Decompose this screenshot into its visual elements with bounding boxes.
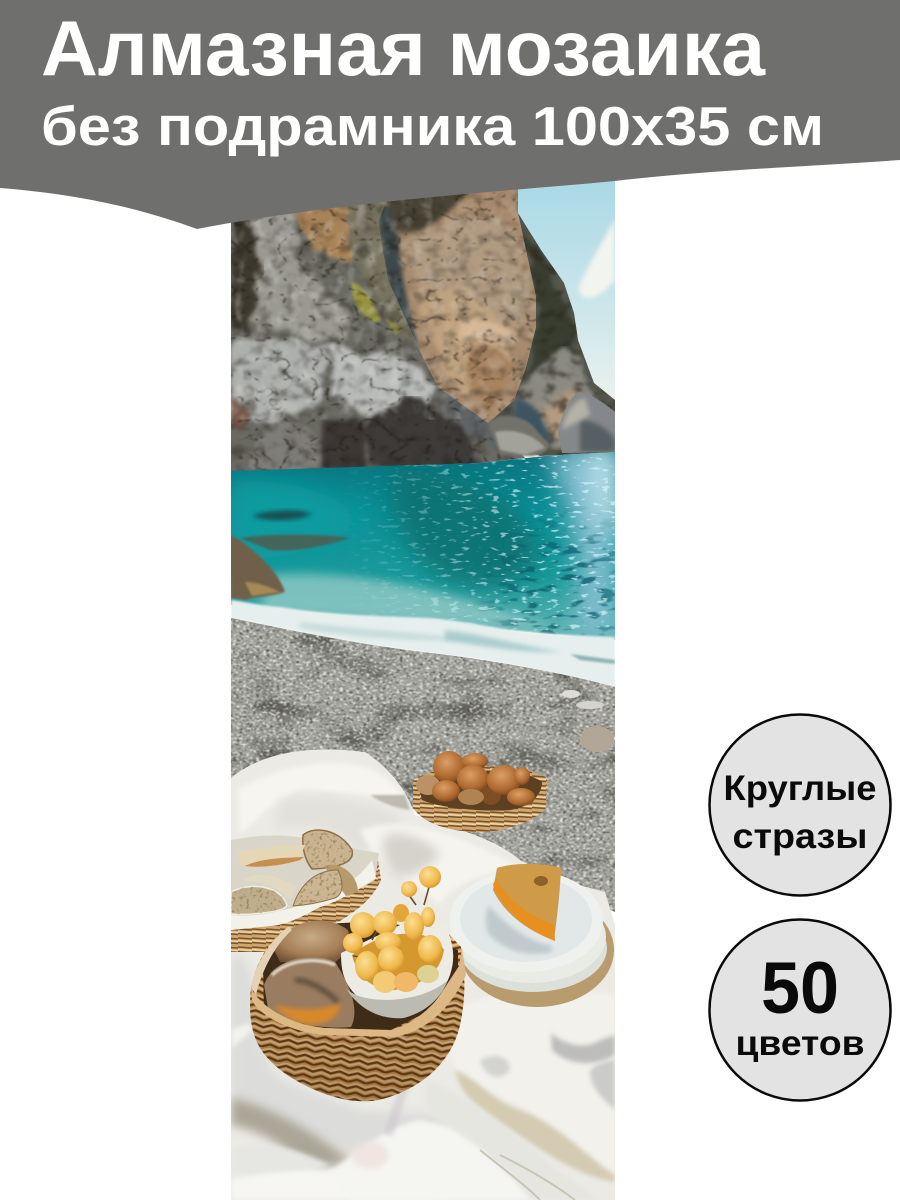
grape stems: [352, 888, 430, 958]
subtitle: без подрамника 100х35 см: [41, 95, 824, 157]
rocks at waterline: [488, 416, 549, 456]
right vegetated cliff: [488, 205, 618, 460]
pebble beach: [231, 615, 616, 915]
badge: round rhinestones: Круглые: [724, 769, 876, 808]
bread slice: [493, 864, 561, 940]
right boulder: [558, 392, 615, 453]
roll basket: [413, 751, 547, 832]
plates and bread slice: [449, 864, 614, 1007]
header banner: [0, 0, 900, 229]
title: Алмазная мозаика: [41, 4, 766, 92]
lower left folds: [231, 955, 450, 1155]
banner shape: [0, 0, 900, 229]
panel: diamond mosaic picture: [231, 180, 618, 1200]
central tan cliff: [378, 190, 536, 423]
right side folds: [446, 990, 615, 1180]
grapes: [343, 866, 442, 993]
badge: 50 colours: 50: [761, 948, 839, 1029]
basket front rim: [251, 948, 466, 1037]
sky: [518, 181, 615, 400]
surf: [231, 600, 615, 688]
bread slices: [303, 830, 352, 869]
bowl of grapes: [341, 866, 453, 1018]
badge: round rhinestones: стразы: [732, 817, 868, 856]
badge: round rhinestones: [710, 714, 890, 896]
loaves: [274, 920, 349, 962]
left grey massif: [231, 195, 531, 475]
blanket: [231, 749, 615, 1200]
lens flare: [384, 1089, 409, 1136]
bread basket left: [231, 825, 381, 952]
basket interior: [263, 922, 458, 1030]
sea: [231, 450, 616, 645]
badge: 50 colours: [710, 920, 890, 1100]
left water rock: [231, 535, 285, 600]
large wicker basket: [250, 920, 466, 1101]
badge: 50 colours: цветов: [736, 1024, 864, 1063]
